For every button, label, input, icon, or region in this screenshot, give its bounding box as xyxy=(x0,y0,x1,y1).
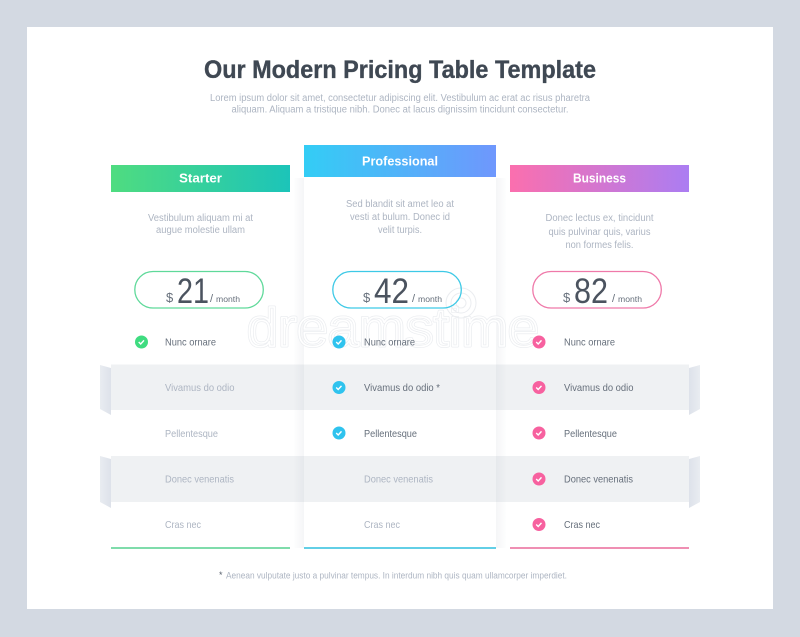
starter description: augue molestie ullam xyxy=(156,225,245,236)
intro text: aliquam. Aliquam a tristique nibh. Donec at lacus dignissim tincidunt consectetur. xyxy=(232,104,568,116)
starter description: Vestibulum aliquam mi at xyxy=(148,213,253,224)
business description: quis pulvinar quis, varius xyxy=(548,227,650,238)
starter features: Vivamus do odio xyxy=(165,382,235,394)
business bottom line xyxy=(510,547,689,549)
business description: Donec lectus ex, tincidunt xyxy=(546,213,654,224)
professional description: velit turpis. xyxy=(378,225,422,236)
business features: Donec venenatis xyxy=(564,474,633,486)
business features xyxy=(532,336,634,531)
starter header: Starter xyxy=(179,170,222,186)
business description xyxy=(546,213,654,251)
business header: Business xyxy=(573,170,626,186)
professional price pill: month xyxy=(418,294,442,304)
professional features: Pellentesque xyxy=(364,428,417,440)
starter price pill: $ xyxy=(166,290,174,305)
title: Our Modern Pricing Table Template xyxy=(204,56,596,84)
business price pill: $ xyxy=(563,290,571,305)
intro text xyxy=(210,93,590,116)
watermark: dreamstime xyxy=(247,298,539,358)
business features: Pellentesque xyxy=(564,428,617,440)
starter bottom line xyxy=(111,547,290,549)
footnote: Aenean vulputate justo a pulvinar tempus. In interdum nibh quis quam ullamcorper imperdiet. xyxy=(226,570,567,580)
professional price pill xyxy=(333,272,461,311)
starter price pill: 21 xyxy=(177,272,209,311)
business price pill: month xyxy=(618,294,642,304)
business description: non formes felis. xyxy=(566,240,634,251)
panel: business xyxy=(510,165,689,549)
business features: Nunc ornare xyxy=(564,336,615,348)
business features: Vivamus do odio xyxy=(564,382,634,394)
watermark: dreamstime xyxy=(247,298,539,358)
starter description xyxy=(148,213,253,236)
icon: pink checks xyxy=(532,336,546,531)
starter header xyxy=(111,165,290,192)
business price pill: 82 xyxy=(574,272,608,311)
panel: starter xyxy=(111,165,290,549)
footnote: * xyxy=(219,570,223,580)
starter features xyxy=(135,336,235,531)
icon: green check xyxy=(135,336,148,348)
professional description: Sed blandit sit amet leo at xyxy=(346,199,454,210)
professional bottom line xyxy=(304,547,496,549)
icon: blue checks xyxy=(332,336,346,440)
professional price pill: $ xyxy=(363,290,371,305)
starter features: Pellentesque xyxy=(165,428,218,440)
professional price pill: 42 xyxy=(374,272,409,311)
business price pill xyxy=(533,272,661,311)
professional description: vesti at bulum. Donec id xyxy=(350,212,450,223)
business features: Cras nec xyxy=(564,519,600,531)
starter price pill: / xyxy=(210,293,214,305)
professional features: Nunc ornare xyxy=(364,336,415,348)
professional features: Vivamus do odio * xyxy=(364,382,440,394)
starter features: Donec venenatis xyxy=(165,474,234,486)
starter price pill: month xyxy=(216,294,240,304)
panel: professional xyxy=(304,145,496,549)
professional header xyxy=(304,145,496,177)
starter features: Nunc ornare xyxy=(165,336,216,348)
striped row bands with folded ends xyxy=(100,364,700,508)
professional price pill: / xyxy=(412,293,416,305)
business header xyxy=(510,165,689,192)
professional description xyxy=(346,199,454,236)
professional features: Cras nec xyxy=(364,519,400,531)
starter price pill xyxy=(135,272,263,311)
intro text: Lorem ipsum dolor sit amet, consectetur adipiscing elit. Vestibulum ac erat ac risus pharetra xyxy=(210,93,590,104)
starter features: Cras nec xyxy=(165,519,201,531)
professional features: Donec venenatis xyxy=(364,474,433,486)
professional features xyxy=(332,336,440,531)
professional header: Professional xyxy=(362,154,438,168)
business price pill: / xyxy=(612,293,616,305)
professional column shadow xyxy=(294,178,506,548)
